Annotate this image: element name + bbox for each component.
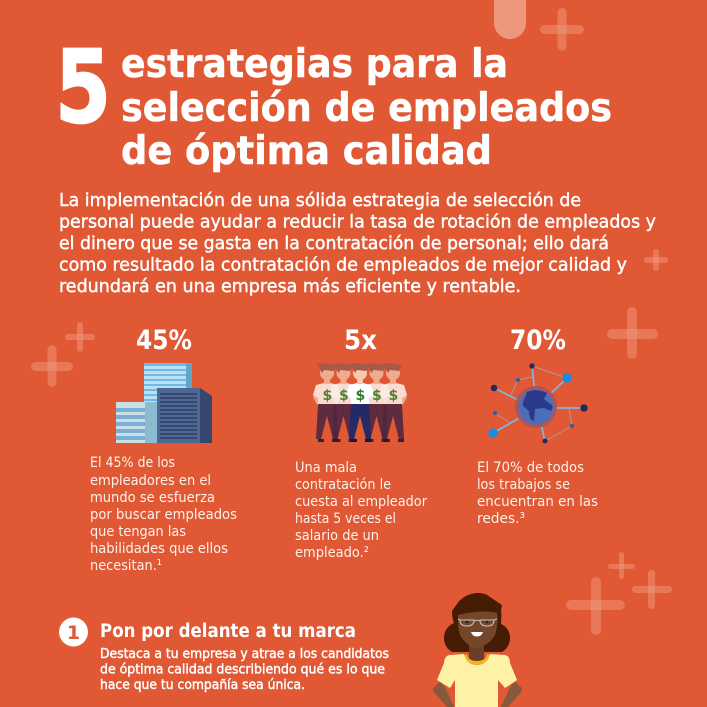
icon: globe network (488, 363, 588, 444)
intro paragraph (59, 190, 656, 297)
illustration: woman with glasses (433, 593, 522, 707)
worker 2 (330, 363, 358, 442)
step 1 text (100, 647, 389, 693)
title: de óptima calidad (121, 128, 492, 174)
icon: five workers with dollar shirts: $ (322, 388, 332, 404)
stat text: 5x: salario de un (295, 528, 379, 544)
stat text: 45%: empleadores en el (90, 473, 211, 489)
stat text: 45%: mundo se esfuerza (90, 490, 215, 506)
stat: 45%: 45% (136, 325, 192, 356)
stat: 70%: 70% (510, 325, 566, 356)
title (55, 28, 612, 174)
stat text: 70%: redes.³ (477, 511, 525, 527)
icon: five workers with dollar shirts: $ (339, 388, 349, 404)
stat text: 5x: hasta 5 veces el (295, 511, 396, 527)
smile (471, 632, 483, 636)
icon: office buildings (116, 363, 212, 443)
title: 5 (55, 28, 111, 146)
icon: five workers with dollar shirts: $ (372, 388, 382, 404)
step 1 number badge: 1 (67, 622, 80, 644)
title: selección de empleados (121, 85, 612, 131)
worker 5 (379, 363, 407, 442)
stat text: 5x: cuesta al empleador (295, 494, 427, 510)
stat text: 5x (295, 460, 427, 561)
stat text: 45%: El 45% de los (90, 455, 175, 471)
shirt (437, 654, 517, 707)
icon: five workers with dollar shirts (313, 363, 407, 442)
step 1 text: Destaca a tu empresa y atrae a los candidatos (100, 647, 389, 662)
icon: five workers with dollar shirts: $ (388, 388, 398, 404)
step 1 text: hace que tu compañía sea única. (100, 678, 305, 693)
step 1 heading: Pon por delante a tu marca (100, 621, 356, 642)
title: estrategias para la (121, 41, 508, 87)
intro paragraph: el dinero que se gasta en la contratación de personal; ello dará (59, 233, 609, 254)
intro paragraph: personal puede ayudar a reducir la tasa de rotación de empleados y (59, 212, 656, 232)
face and neck (469, 640, 484, 661)
worker 4 (362, 363, 390, 442)
intro paragraph: como resultado la contratación de empleados de mejor calidad y (59, 254, 627, 276)
stat: 5x: 5x (344, 325, 377, 356)
stat text: 5x: empleado.² (295, 545, 369, 561)
stat text: 70%: encuentran en las (477, 494, 598, 510)
arms (433, 682, 522, 707)
stat text: 45%: necesitan.¹ (90, 558, 162, 574)
stat text: 5x: contratación le (295, 477, 391, 493)
worker 3 (346, 363, 374, 442)
step 1 text: de óptima calidad describiendo qué es lo que (100, 662, 385, 678)
step 1 number badge (59, 618, 88, 646)
stat text: 45% (90, 455, 237, 574)
stat text: 45%: por buscar empleados (90, 507, 237, 523)
stat text: 45%: que tengan las (90, 524, 186, 540)
stat text: 70%: El 70% de todos (477, 460, 584, 476)
glasses (458, 619, 497, 626)
stat text: 70% (477, 460, 598, 527)
hair (444, 593, 510, 652)
intro paragraph: La implementación de una sólida estrategia de selección de (59, 190, 581, 211)
stat text: 5x: Una mala (295, 460, 357, 476)
stat text: 45%: habilidades que ellos (90, 541, 228, 557)
stat text: 70%: los trabajos se (477, 477, 570, 493)
worker 1 (313, 363, 341, 442)
icon: five workers with dollar shirts: $ (356, 388, 365, 404)
intro paragraph: redundará en una empresa más eficiente y rentable. (59, 276, 521, 297)
collar (464, 654, 490, 665)
